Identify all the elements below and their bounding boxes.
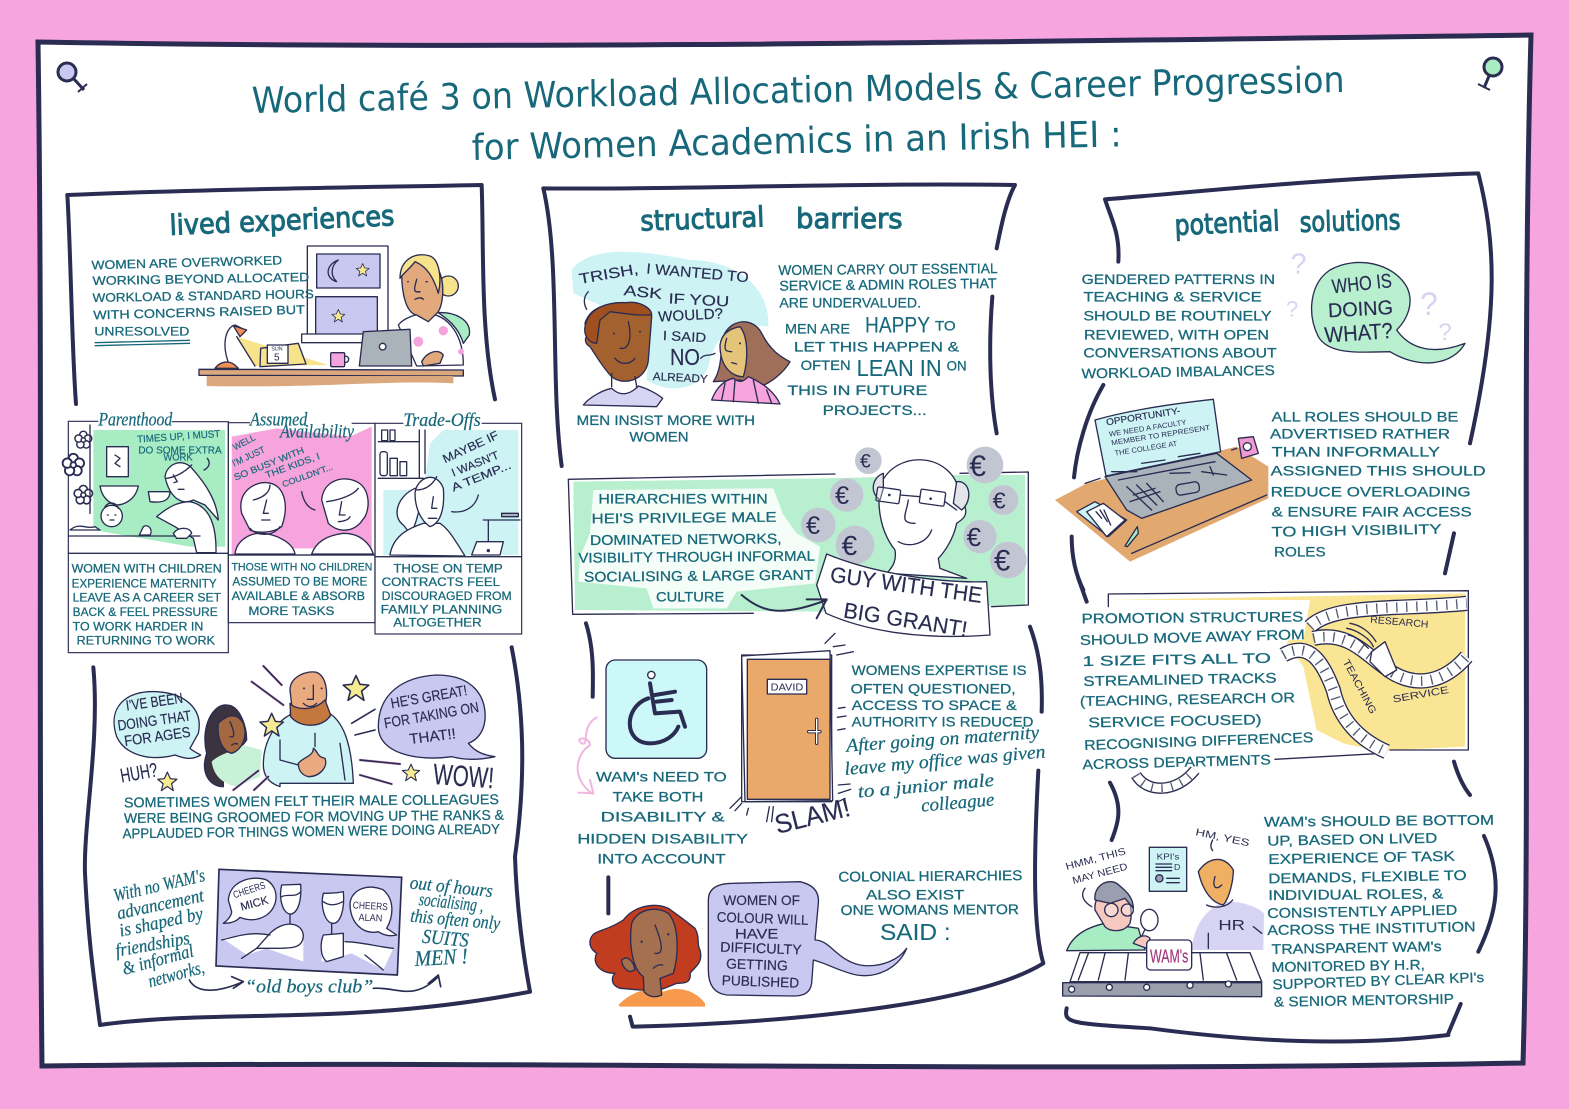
text: hierarchies: SOCIALISING & LARGE GRANT	[584, 567, 814, 585]
text: essential roles: HAPPY	[865, 313, 930, 338]
illustration: reviewing WAMs conveyor	[1063, 827, 1264, 997]
illustration: woman with dark hair	[205, 705, 262, 787]
card: KPIs: KPI's	[1157, 852, 1179, 861]
text: expertise questioned: ACCESS TO SPACE &	[852, 697, 1017, 713]
text: promotion structures: (TEACHING, RESEARCH OR	[1080, 689, 1295, 709]
exclamation: slam: SLAM!	[772, 792, 853, 840]
text: colonial hierarchies: SAID :	[880, 919, 951, 945]
text: bottom up: DEMANDS, FLEXIBLE TO	[1268, 867, 1467, 886]
text: bottom up: CONSISTENTLY APPLIED	[1267, 902, 1457, 921]
text: essential roles: LET THIS HAPPEN &	[794, 339, 960, 355]
text: hierarchies: HEI'S PRIVILEGE MALE	[592, 509, 777, 526]
speech bubble: he's great: HE'S GREAT!	[390, 683, 469, 712]
caption: trade-offs: CONTRACTS FEEL	[382, 575, 500, 589]
illustration: woman working late at desk	[199, 246, 470, 386]
text: all roles: TO HIGH VISIBILITY	[1271, 521, 1443, 540]
text: gendered patterns: TEACHING & SERVICE	[1083, 289, 1262, 305]
illustration: woman working late at desk: SUN	[271, 347, 283, 353]
text: gendered patterns: SHOULD BE ROUTINELY	[1083, 308, 1272, 324]
caption: parenthood: BACK & FEEL PRESSURE	[73, 605, 218, 619]
title: for Women Academics in an Irish HEI :	[471, 114, 1122, 169]
text: overworked: WITH CONCERNS RAISED BUT	[93, 303, 306, 322]
text: all roles: ALL ROLES SHOULD BE	[1272, 409, 1458, 425]
illustration: laptop opportunity: THE COLLEGE AT	[1114, 439, 1178, 458]
icon: euro coins: €	[806, 512, 820, 540]
text: groomed: WERE BEING GROOMED FOR MOVING UP THE RANKS &	[124, 807, 505, 826]
caption: parenthood: TO WORK HARDER IN	[73, 620, 203, 634]
speech: times up: DO SOME EXTRA	[138, 445, 222, 456]
text: hierarchies	[578, 490, 815, 605]
heading: structural barriers: barriers	[796, 202, 903, 235]
speech bubble: doing that for ages: I'VE BEEN	[125, 691, 184, 715]
speech: busy with the kids: WELL	[231, 432, 257, 452]
speech bubble: women of colour: GETTING	[726, 955, 788, 973]
text: all roles: ADVERTISED RATHER	[1270, 425, 1450, 441]
text: bottom up: SUPPORTED BY CLEAR KPI's	[1272, 969, 1484, 992]
icon: euro coins: €	[969, 450, 986, 483]
text: groomed	[123, 791, 505, 841]
text: bottom up: TRANSPARENT WAM's	[1271, 938, 1442, 957]
speech: busy with the kids: COULDN'T...	[281, 462, 334, 489]
heading: potential solutions: potential	[1174, 204, 1280, 242]
illustration: promotion tracks: TEACHING	[1340, 658, 1378, 716]
speech: hmm	[1065, 846, 1129, 907]
text: bottom up: WAM's SHOULD BE BOTTOM	[1264, 812, 1494, 830]
illustration: promotion tracks: SERVICE	[1392, 685, 1450, 706]
icon: euro coins: €	[994, 545, 1010, 578]
speech: maybe if: MAYBE IF	[440, 428, 501, 466]
illustration: applauded man	[158, 666, 420, 791]
text: all roles: ASSIGNED THIS SHOULD	[1271, 463, 1486, 479]
icon: euro coins: €	[993, 488, 1006, 514]
text: with no WAMs: networks,	[146, 957, 207, 992]
text: bottom up: INDIVIDUAL ROLES, &	[1268, 885, 1444, 903]
text: with no WAMs	[111, 865, 207, 992]
text: essential roles: ON	[947, 358, 967, 374]
speech: maybe if: A TEMP...	[450, 460, 513, 494]
illustration: laptop opportunity: OPPORTUNITY-	[1105, 406, 1181, 427]
text: overworked	[91, 253, 318, 346]
text: essential roles: OFTEN	[801, 357, 851, 373]
heading: potential solutions: solutions	[1299, 203, 1401, 239]
panel: lived experiences top	[63, 185, 522, 653]
speech: trish: ALREADY	[653, 371, 709, 386]
illustration: woman with red hair	[590, 905, 705, 1007]
text: bottom up: MONITORED BY H.R,	[1271, 956, 1425, 975]
text: gendered patterns	[1081, 271, 1277, 381]
speech bubble: women of colour	[708, 882, 907, 996]
text: men insist: MEN INSIST MORE WITH	[577, 412, 755, 428]
arrow: to old boys club	[189, 977, 243, 990]
speech: busy with the kids: I'M JUST	[231, 445, 267, 468]
speech: cheers alan: CHEERS	[353, 900, 388, 913]
caption: trade-offs	[375, 557, 522, 634]
text: maternity quote: leave my office was given	[844, 741, 1046, 780]
text: colonial hierarchies: ONE WOMANS MENTOR	[841, 901, 1019, 918]
text: all roles: THAN INFORMALLY	[1272, 444, 1441, 460]
speech: hm yes: HM, YES	[1194, 827, 1251, 849]
speech: maybe if: I WASN'T	[450, 450, 501, 479]
speech: trish: ASK	[623, 283, 663, 303]
text: promotion structures: 1 SIZE FITS ALL TO	[1082, 650, 1271, 669]
text: bottom up: UP, BASED ON LIVED	[1267, 830, 1437, 849]
text: hierarchies: CULTURE	[656, 589, 724, 605]
illustration: men insist	[572, 252, 790, 407]
heading: structural barriers: structural	[640, 200, 765, 238]
box: WAMs: WAM's	[1150, 946, 1188, 967]
speech: times up: TIMES UP, I MUST	[137, 429, 221, 446]
text: essential roles: THIS IN FUTURE	[787, 382, 927, 398]
text: maternity quote: After going on maternity	[843, 722, 1041, 757]
text: expertise questioned: OFTEN QUESTIONED,	[851, 680, 1016, 696]
illustration: man with big grant	[873, 460, 969, 578]
speech bubble: he's great: FOR TAKING ON	[383, 700, 480, 732]
caption: trade-offs: DISCOURAGED FROM	[382, 589, 512, 603]
arrow: to suits men	[373, 975, 441, 991]
text: with no WAMs: advancement	[115, 885, 206, 924]
speech: trish: WOULD?	[658, 306, 723, 326]
speech bubble: doing that for ages	[114, 691, 201, 758]
banner: guy with the big grant	[817, 554, 990, 642]
panel: potential solutions bottom	[1063, 578, 1496, 1042]
text: gendered patterns: REVIEWED, WITH OPEN	[1084, 326, 1269, 342]
text: essential roles: LEAN IN	[857, 355, 942, 381]
text: all roles: & ENSURE FAIR ACCESS	[1272, 504, 1472, 520]
text: out of hours: this often only	[410, 906, 502, 935]
illustration: promotion tracks: RESEARCH	[1370, 615, 1429, 631]
illustration: laptop opportunity: MEMBER TO REPRESENT	[1111, 423, 1211, 447]
panel: parenthood comic	[63, 421, 228, 553]
text: disability: TAKE BOTH	[613, 789, 703, 805]
text: promotion structures: RECOGNISING DIFFERENCES	[1084, 729, 1314, 753]
text: groomed: SOMETIMES WOMEN FELT THEIR MALE COLLEAGUES	[124, 791, 499, 810]
text: hierarchies: DOMINATED NETWORKS,	[590, 530, 782, 548]
speech bubble: doing that for ages: DOING THAT	[117, 708, 192, 735]
illustration: laptop opportunity	[1055, 399, 1268, 562]
text: disability: DISABILITY &	[601, 809, 726, 825]
text: promotion structures: PROMOTION STRUCTURES	[1082, 608, 1303, 626]
text: maternity quote: colleague	[920, 789, 995, 817]
text: disability	[577, 769, 749, 866]
speech bubble: women of colour: PUBLISHED	[722, 972, 799, 991]
text: bottom up: & SENIOR MENTORSHIP	[1274, 991, 1454, 1010]
text: all roles	[1270, 409, 1486, 560]
panel: structural barriers bottom	[577, 623, 1046, 1027]
caption: assumed availability: AVAILABLE & ABSORB	[232, 589, 365, 603]
text: with no WAMs: friendships	[114, 928, 191, 962]
text: disability: HIDDEN DISABILITY	[577, 830, 749, 846]
card: KPIs: D	[1174, 862, 1180, 872]
speech: times up: WORK	[163, 452, 193, 463]
text: men insist	[577, 412, 755, 445]
icon: left pin	[58, 63, 87, 92]
speech bubble: he's great: THAT!!	[409, 726, 457, 748]
icon: right pin	[1478, 58, 1502, 90]
icon: question marks: ?	[1438, 319, 1452, 346]
text: disability: WAM's NEED TO	[596, 769, 727, 785]
caption: assumed availability: ASSUMED TO BE MORE	[232, 575, 367, 589]
text: out of hours: SUITS	[421, 926, 470, 952]
text: colonial hierarchies: COLONIAL HIERARCHIES	[838, 867, 1022, 885]
text: bottom up: EXPERIENCE OF TASK	[1268, 848, 1456, 867]
text: out of hours: MEN !	[413, 943, 469, 971]
illustration: old boys club toast	[216, 869, 402, 975]
text: essential roles	[778, 260, 998, 418]
speech: hmm: MAY NEED	[1071, 862, 1129, 887]
heading: assumed availability: Assumed	[248, 409, 308, 430]
text: with no WAMs: is shaped by	[117, 903, 205, 942]
speech: hm yes	[1194, 827, 1251, 851]
icon: wheelchair tile	[606, 660, 707, 758]
caption: assumed availability: MORE TASKS	[248, 604, 334, 618]
speech: cheers mick: MICK	[239, 895, 270, 914]
heading: assumed availability	[248, 409, 355, 442]
icon: question marks: ?	[1420, 286, 1438, 322]
text: with no WAMs: & informal	[120, 941, 196, 980]
speech: trish: NO	[670, 344, 700, 370]
text: colonial hierarchies: ALSO EXIST	[866, 886, 965, 902]
text: hierarchies: VISIBILITY THROUGH INFORMAL	[578, 548, 815, 566]
heading: structural barriers	[640, 200, 903, 238]
exclamation: huh: HUH?	[119, 759, 159, 788]
text: out of hours: out of hours	[409, 872, 494, 902]
text: expertise questioned: WOMENS EXPERTISE IS	[852, 662, 1027, 678]
caption: parenthood: LEAVE AS A CAREER SET	[73, 591, 221, 605]
heading: assumed availability: Availability	[278, 421, 355, 442]
text: expertise questioned	[851, 662, 1033, 730]
speech bubble: who is doing what	[1312, 262, 1465, 363]
text: old boys club: “old boys club”	[245, 977, 373, 998]
text: gendered patterns: GENDERED PATTERNS IN	[1082, 271, 1275, 287]
caption: assumed availability: THOSE WITH NO CHILDREN	[232, 562, 372, 574]
speech: cheers alan: ALAN	[358, 913, 383, 924]
panel: structural barriers top	[543, 185, 1028, 642]
caption: parenthood: WOMEN WITH CHILDREN	[72, 562, 222, 576]
text: gendered patterns: WORKLOAD IMBALANCES	[1081, 362, 1275, 381]
text: maternity quote	[843, 722, 1046, 817]
speech: cheers mick	[223, 878, 276, 923]
speech bubble: who is doing what: DOING	[1327, 297, 1394, 322]
caption: parenthood: RETURNING TO WORK	[77, 634, 216, 648]
speech: hmm: HMM, THIS	[1065, 846, 1127, 873]
illustration: laptop opportunity: WE NEED A FACULTY	[1108, 417, 1187, 439]
icon: question marks: ?	[1286, 297, 1298, 322]
heading: potential solutions	[1174, 203, 1401, 242]
speech: times up	[137, 429, 222, 463]
text: all roles: ROLES	[1274, 544, 1326, 560]
icon: question marks	[1286, 248, 1452, 346]
text: overworked: UNRESOLVED	[94, 324, 189, 338]
illustration: promotion tracks	[1108, 591, 1468, 788]
icon: euro coins: €	[860, 451, 871, 472]
speech: maybe if	[440, 428, 513, 494]
text: essential roles: SERVICE & ADMIN ROLES THAT	[779, 275, 997, 294]
icon: euro coins	[801, 447, 1027, 578]
text: essential roles: PROJECTS...	[823, 402, 927, 418]
text: expertise questioned: AUTHORITY IS REDUCED	[852, 714, 1033, 730]
text: promotion structures	[1080, 608, 1314, 772]
text: men insist: WOMEN	[629, 429, 689, 445]
text: overworked: WORKING BEYOND ALLOCATED	[92, 270, 309, 288]
icon: question marks: ?	[1291, 248, 1307, 280]
exclamation: wow: WOW!	[432, 758, 495, 795]
text: maternity quote: to a junior male	[857, 770, 995, 803]
panel: potential solutions top	[1055, 173, 1492, 590]
text: essential roles: TO	[935, 318, 956, 334]
title	[251, 60, 1345, 169]
speech: cheers alan	[350, 887, 397, 936]
text: essential roles: MEN ARE	[785, 320, 850, 336]
panel: trade-offs comic	[375, 410, 522, 557]
text: all roles: REDUCE OVERLOADING	[1271, 484, 1471, 500]
panel: hierarchies green box	[568, 447, 1028, 642]
speech: busy with the kids	[231, 432, 334, 489]
illustration: slammed door	[730, 633, 853, 822]
speech: cheers mick: CHEERS	[232, 880, 267, 901]
speech bubble: women of colour: HAVE	[735, 925, 778, 941]
text: promotion structures: STREAMLINED TRACKS	[1083, 670, 1277, 689]
heading: parenthood: Parenthood	[97, 409, 173, 430]
speech bubble: women of colour: COLOUR WILL	[717, 909, 809, 928]
card: KPIs	[1149, 847, 1187, 891]
text: essential roles: ARE UNDERVALUED.	[779, 294, 921, 310]
text: with no WAMs: With no WAM's	[111, 865, 207, 907]
box: WAMs	[1147, 940, 1192, 970]
speech bubble: he's great	[378, 675, 495, 759]
title: World café 3 on Workload Allocation Models & Career Progression	[251, 60, 1345, 122]
text: hierarchies: HIERARCHIES WITHIN	[598, 490, 768, 506]
caption: trade-offs: THOSE ON TEMP	[393, 562, 503, 576]
text: out of hours: socialising ,	[418, 889, 485, 917]
speech: busy with the kids: SO BUSY WITH	[232, 445, 306, 483]
arrow: to banner	[742, 595, 827, 618]
heading: trade-offs: Trade-Offs	[403, 410, 481, 431]
speech: busy with the kids: THE KIDS, I	[264, 451, 321, 480]
caption: parenthood: EXPERIENCE MATERNITY	[72, 576, 217, 590]
caption: parenthood	[68, 553, 228, 653]
text: overworked: WOMEN ARE OVERWORKED	[91, 253, 282, 272]
icon: euro coins: €	[835, 482, 849, 510]
speech bubble: women of colour: WOMEN OF	[723, 892, 800, 908]
speech: trish: TRISH,	[578, 262, 640, 288]
banner: guy with the big grant: BIG GRANT!	[842, 598, 969, 642]
icon: euro coins: €	[842, 530, 858, 561]
text: disability: INTO ACCOUNT	[597, 850, 726, 866]
speech bubble: women of colour: DIFFICULTY	[720, 939, 803, 958]
icon: euro coins: €	[967, 522, 982, 552]
text: groomed: APPLAUDED FOR THINGS WOMEN WERE DOING ALREADY	[123, 821, 501, 841]
speech: trish: I WANTED TO	[646, 261, 749, 286]
text: bottom up	[1264, 812, 1494, 1010]
text: gendered patterns: CONVERSATIONS ABOUT	[1083, 345, 1277, 361]
heading: lived experiences: lived experiences	[169, 199, 395, 242]
text: bottom up: ACROSS THE INSTITUTION	[1267, 918, 1476, 938]
speech: trish: IF YOU	[668, 291, 730, 311]
text: promotion structures: SERVICE FOCUSED)	[1088, 711, 1262, 730]
illustration: slammed door: DAVID	[771, 682, 803, 693]
illustration: woman working late at desk: 5	[274, 353, 280, 364]
panel: assumed availability comic	[228, 409, 375, 555]
illustration: reviewing WAMs conveyor: HR	[1218, 918, 1245, 934]
text: colonial hierarchies	[838, 867, 1022, 945]
speech bubble: who is doing what: WHAT?	[1324, 318, 1394, 348]
text: overworked: WORKLOAD & STANDARD HOURS.	[92, 287, 318, 305]
speech bubble: doing that for ages: FOR AGES	[123, 725, 192, 750]
caption: trade-offs: FAMILY PLANNING	[381, 602, 502, 616]
caption: assumed availability	[228, 555, 375, 623]
speech: trish: I SAID	[663, 328, 707, 345]
text: promotion structures: SHOULD MOVE AWAY FROM	[1080, 626, 1305, 648]
text: promotion structures: ACROSS DEPARTMENTS	[1082, 751, 1271, 772]
text: out of hours	[409, 872, 502, 971]
arrow: pink curl	[578, 717, 597, 793]
speech bubble: who is doing what: WHO IS	[1331, 270, 1393, 298]
text: essential roles: WOMEN CARRY OUT ESSENTIAL	[778, 260, 998, 278]
speech: trish	[578, 261, 749, 386]
panel: lived experiences bottom	[85, 647, 530, 1025]
caption: trade-offs: ALTOGETHER	[393, 616, 482, 630]
banner: guy with the big grant: GUY WITH THE	[829, 562, 984, 608]
